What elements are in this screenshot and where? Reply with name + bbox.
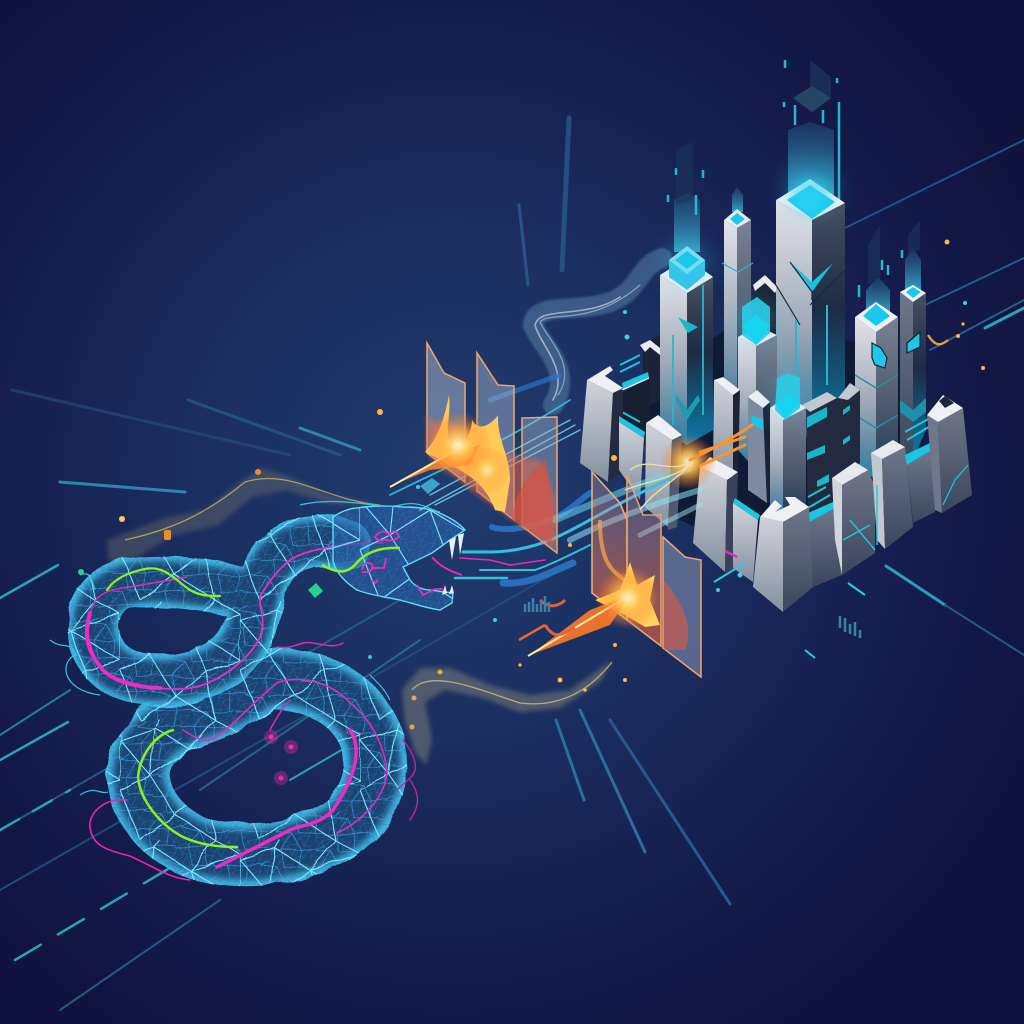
tower: right [855, 302, 898, 480]
wall block: left [580, 366, 623, 482]
smoke ribbon: upper left of snake [107, 468, 382, 565]
tower: tall left [660, 246, 713, 445]
snake lower coil [90, 642, 418, 880]
right corner block [927, 395, 972, 513]
panel 6 [663, 537, 701, 677]
wall block: second and bracket [619, 415, 682, 530]
tower: main tall [776, 177, 845, 440]
panel 3 [522, 417, 557, 553]
glass panels upper [390, 343, 557, 553]
fortress [580, 60, 972, 612]
snake upper coil and neck [87, 541, 383, 689]
snake upper coil accent lines [87, 543, 383, 689]
sparks and particles [377, 240, 985, 692]
panel 1 [427, 343, 465, 482]
impact flare on fortress [625, 425, 752, 510]
data beams above towers [668, 60, 921, 312]
smoke ribbon: upper right to fortress [533, 258, 662, 405]
glowing magenta nodes [264, 730, 298, 785]
tower: front with cube [770, 373, 806, 520]
snake head [322, 506, 465, 610]
snake [50, 501, 465, 880]
back wall chevrons [640, 275, 778, 410]
dark fortress base [623, 320, 930, 570]
panel 4 [592, 472, 627, 620]
panel 2 [477, 353, 514, 520]
wall block: inner front [733, 497, 842, 612]
dark inner blocks [620, 355, 860, 525]
snake fangs [442, 533, 464, 595]
smoke ribbon: lower centre [402, 660, 612, 765]
panel 5 [627, 475, 661, 646]
stray wire tendrils [50, 501, 440, 795]
data streams towards fortress [390, 375, 700, 583]
flames lower [528, 520, 688, 656]
glass panels lower [528, 472, 701, 677]
snake lower coil accent lines [90, 642, 418, 880]
wall block: centre [693, 457, 738, 572]
small green and cyan chips [78, 569, 372, 659]
tower: far right [900, 285, 926, 460]
tall narrow blocks [713, 377, 770, 503]
tower: slim back [722, 209, 753, 420]
snake venom markings [362, 531, 462, 595]
cyan glow over tops [665, 166, 836, 418]
right front wall [832, 418, 935, 575]
flames upper [390, 395, 555, 550]
tower: centre with cube [738, 297, 777, 470]
